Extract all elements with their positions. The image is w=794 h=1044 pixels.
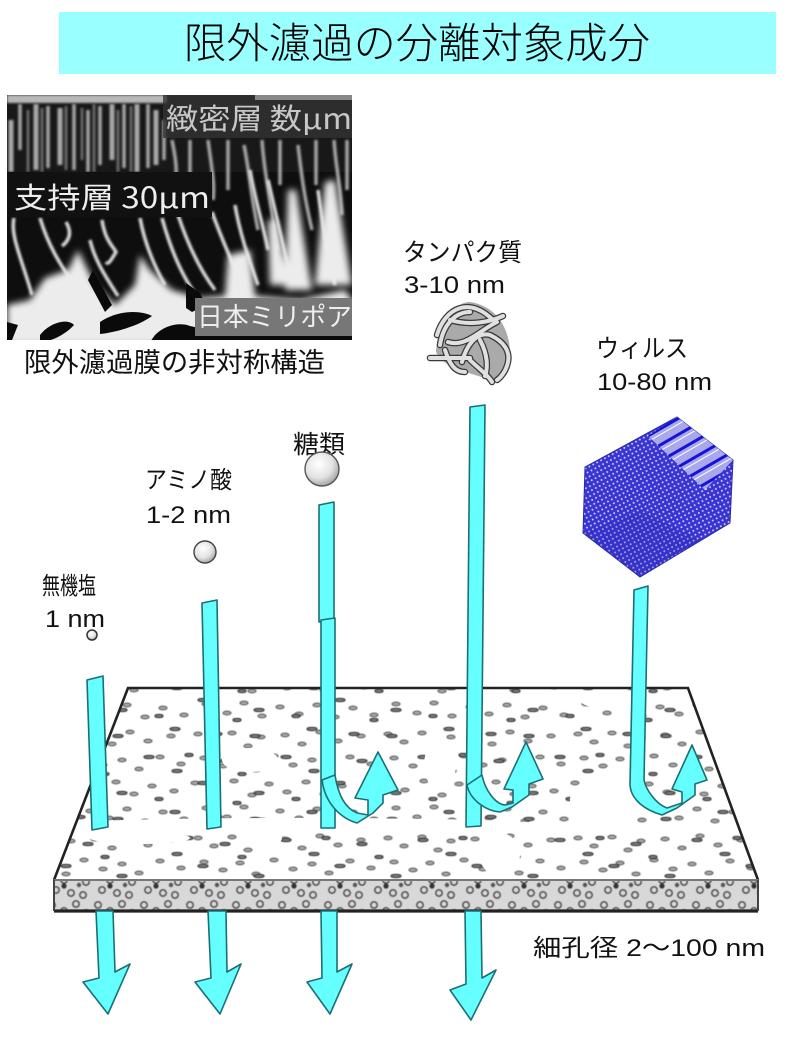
arrow: permeate 4 (450, 911, 496, 1020)
micrograph caption: 限外濾過膜の非対称構造 (24, 341, 325, 380)
icon: virus capsid (583, 417, 733, 577)
label: inorganic salt (42, 566, 105, 633)
label: inorganic salt: 1 nm (45, 606, 105, 633)
icon: sugar particle (305, 452, 339, 486)
title banner: 限外濾過の分離対象成分 (184, 10, 650, 71)
label: virus (596, 329, 712, 396)
micrograph streaks: lower support layer (13, 170, 335, 296)
label: virus: 10-80 nm (597, 369, 712, 396)
micrograph streaks: dense upper layer (11, 104, 347, 250)
arrows: permeate below the membrane (83, 911, 496, 1020)
arrow: sugar partly rejected (319, 502, 398, 828)
label: amino acid: 1-2 nm (146, 502, 231, 529)
arrow: permeate 2 (195, 911, 241, 1014)
label strip: credit: 日本ミリポア (197, 297, 352, 334)
arrow: protein rejected (466, 405, 543, 827)
icon: amino acid particle (194, 541, 216, 563)
micrograph bright base (7, 180, 352, 345)
membrane side section (54, 880, 758, 911)
panel: membrane slab (50, 688, 758, 911)
label: protein: タンパク質 (403, 233, 522, 269)
icon: protein coil (430, 302, 510, 382)
panel: membrane cross-section micrograph (7, 92, 352, 345)
arrow: virus rejected (630, 586, 707, 815)
micrograph dark blotches (7, 270, 352, 342)
label: protein (403, 233, 522, 299)
label: inorganic salt: 無機塩 (42, 566, 96, 601)
arrow: amino acid passes through (202, 600, 221, 829)
label: amino acid (145, 460, 232, 529)
label: virus: ウィルス (596, 329, 688, 365)
membrane top surface (50, 688, 758, 880)
title banner (59, 10, 776, 74)
arrow: inorganic salt passes through (87, 676, 108, 830)
label: protein: 3-10 nm (404, 272, 505, 299)
label: amino acid: アミノ酸 (145, 460, 232, 495)
label: pore size: 細孔径 2～100 nm (533, 928, 765, 963)
label strip: support layer: 支持層 30μm (14, 175, 210, 217)
icon: inorganic salt particle (87, 630, 97, 640)
arrow: permeate 3 (307, 911, 352, 1014)
label: sugars: 糖類 (293, 425, 345, 461)
arrow: permeate 1 (83, 911, 130, 1014)
label strip: dense layer: 緻密層 数μm (166, 96, 352, 138)
